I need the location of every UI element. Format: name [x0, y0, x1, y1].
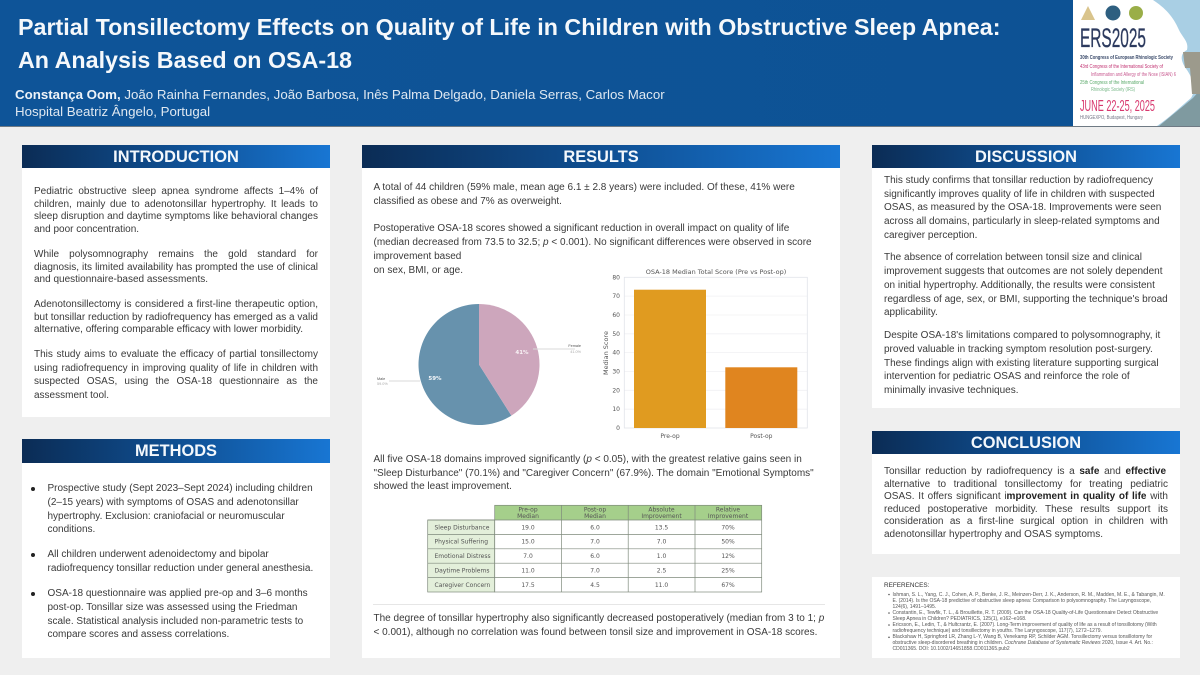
table header — [495, 505, 762, 520]
table values: 19.0 — [521, 524, 535, 532]
methods bullet 2: All children underwent adenoidectomy and bipolar — [48, 549, 269, 560]
references list: obstructive sleep-disordered breathing in children. Cochrane Database of Systematic Reviews 2020, Issue 4. Art. No.: — [892, 640, 1153, 646]
discussion paragraph 2: on initial hypertrophy. Additionally, the results were consistent — [884, 280, 1155, 291]
results paragraph 3 — [374, 454, 814, 492]
methods heading: METHODS — [135, 442, 217, 460]
pie slice: male 59% — [419, 304, 511, 425]
conclusion text: Tonsillar reduction by radiofrequency is a safe and effective — [884, 466, 1166, 477]
table values: 12% — [721, 553, 735, 560]
table values: 67% — [721, 582, 735, 589]
congress logo: ERS2025: 30th Congress of European Rhinologic Society — [1080, 55, 1173, 61]
introduction paragraph 3: alternative, offering comparable efficacy with lower morbidity. — [34, 324, 303, 335]
header banner — [0, 0, 1200, 127]
title — [18, 14, 1000, 73]
introduction paragraph 4: This study aims to evaluate the efficacy of partial tonsillectomy — [34, 349, 318, 360]
bar: post-op 32.5 — [725, 367, 797, 428]
conclusion text: consideration as a first-line surgical option in children with — [884, 516, 1168, 527]
references list: Ericsson, E., Ledin, T., & Hultcrantz, E. (2007). Long-Term improvement of quality of life as a result of tonsillotomy (With — [892, 622, 1157, 628]
results paragraph 2: Postoperative OSA-18 scores showed a significant reduction in overall impact on quality of life — [374, 223, 789, 234]
introduction paragraph 3 — [34, 299, 318, 335]
references list: 124(6), 1491–1495. — [892, 604, 936, 610]
y axis labels: 60 — [612, 312, 620, 319]
table values: 13.5 — [655, 524, 668, 532]
bar chart: OSA-18 median total score — [602, 268, 808, 440]
references list: E. (2014). Is the OSA-18 predictive of obstructive sleep apnea: Comparison to polysomnography. The Laryngoscope, — [892, 598, 1151, 604]
discussion paragraph 3: These findings align with existing literature supporting surgical — [884, 358, 1159, 369]
results paragraph 1 — [374, 182, 795, 207]
introduction paragraph 1: Pediatric obstructive sleep apnea syndrome affects 1–4% of — [34, 186, 318, 197]
discussion paragraph 1: OSAS, as measured by the OSA-18. Improvements were seen — [884, 202, 1161, 213]
table values: 11.0 — [521, 568, 535, 574]
discussion heading — [872, 145, 1180, 168]
y axis labels: 0 — [616, 425, 620, 432]
table header: Median — [584, 513, 606, 520]
x axis labels: Pre-op — [660, 433, 680, 440]
discussion paragraph 1: across all domains, particularly in sleep-related symptoms and — [884, 216, 1160, 227]
pie slice: female 41%: 41% — [515, 350, 529, 356]
table values — [521, 524, 735, 589]
y axis labels: 40 — [612, 350, 620, 357]
methods bullet 2 — [31, 549, 313, 574]
conclusion text: OSAS. It offers significant improvement in quality of life with — [884, 491, 1168, 502]
discussion paragraph 2: applicability. — [884, 307, 938, 318]
table row labels: Sleep Disturbance — [434, 524, 490, 532]
plot area — [624, 277, 807, 428]
methods bullet 3 — [31, 588, 308, 640]
congress logo: ERS2025: Rhinologic Society (IRS) — [1091, 87, 1135, 93]
introduction paragraph 1: sleep disruption and daytime symptoms like behavioral changes — [34, 211, 318, 222]
table header: Improvement — [708, 513, 749, 520]
label: female: 41.0% — [570, 350, 582, 354]
bar: pre-op 73.5 — [634, 290, 706, 428]
table values: 6.0 — [590, 524, 600, 532]
results paragraph 4: < 0.001), although no correlation was found between tonsil size and improvement in OSA-18 scores. — [374, 627, 817, 638]
introduction paragraph 1: and poor concentration. — [34, 224, 139, 235]
label: male — [377, 377, 420, 386]
discussion paragraph 2 — [884, 252, 1168, 318]
discussion paragraph 3: intervention for pediatric OSAS and reinforce the role of — [884, 371, 1130, 382]
y axis labels — [612, 274, 620, 432]
chart title: OSA-18 Median Total Score (Pre vs Post-op) — [646, 268, 786, 276]
table values: 4.5 — [590, 582, 600, 589]
results heading: RESULTS — [563, 148, 639, 166]
table header: Median — [517, 513, 539, 520]
methods bullet 1: (2–15 years) with symptoms of OSAS and adenotonsillar — [48, 497, 299, 508]
panel: results — [362, 145, 840, 658]
introduction heading: INTRODUCTION — [113, 148, 239, 166]
methods bullet 1: conditions. — [48, 524, 95, 535]
pie chart: sex distribution — [377, 304, 582, 425]
table header: Relative — [716, 506, 740, 514]
table header: Pre-op — [518, 506, 538, 514]
introduction paragraph 2: and questionnaire-based assessments. — [34, 274, 208, 285]
authors and affiliation: Constança Oom, João Rainha Fernandes, João Barbosa, Inês Palma Delgado, Daniela Serras, Carlos Macor — [15, 87, 665, 102]
results paragraph 2: on sex, BMI, or age. — [374, 265, 463, 276]
methods bullet 1 — [31, 483, 313, 535]
panel: introduction — [22, 145, 330, 417]
table values: 15.0 — [521, 539, 535, 546]
introduction paragraph 4: assessment tool. — [34, 390, 109, 401]
table values: 7.0 — [590, 539, 600, 546]
table header: Post-op — [584, 506, 606, 514]
discussion paragraph 1: caregiver perception. — [884, 230, 977, 241]
table row labels: Daytime Problems — [434, 568, 489, 574]
results paragraph 4 — [374, 613, 824, 638]
discussion paragraph 3: minimally invasive techniques. — [884, 385, 1019, 396]
conclusion heading — [872, 431, 1180, 454]
results paragraph 3: "Sleep Disturbance" (70.1%) and "Caregiver Concern" (67.9%). The domain "Emotional Symptoms" — [374, 468, 814, 479]
title: Partial Tonsillectomy Effects on Quality of Life in Children with Obstructive Sleep Apnea: — [18, 14, 1000, 40]
table values: 1.0 — [657, 553, 666, 560]
references heading: REFERENCES: — [884, 582, 929, 588]
panel: discussion — [872, 145, 1180, 408]
table header: Absolute — [648, 506, 675, 514]
table row labels — [428, 520, 495, 592]
y axis labels: 30 — [612, 368, 620, 376]
table values: 7.0 — [523, 553, 533, 560]
congress logo: ERS2025: HUNGEXPO, Budapest, Hungary — [1080, 115, 1143, 121]
table values: 25% — [721, 568, 735, 574]
methods bullet 3: scale. Statistical analysis included non-parametric tests to — [48, 616, 303, 626]
introduction paragraph 2 — [34, 249, 318, 285]
table values: 50% — [721, 539, 735, 546]
results paragraph 2: improvement based — [374, 251, 461, 262]
methods bullet 3: post-op. Tonsillar size was assessed using the Friedman — [48, 602, 297, 613]
results paragraph 1: A total of 44 children (59% male, mean age 6.1 ± 2.8 years) were included. Of these, 41% were — [374, 182, 795, 193]
table row labels: Caregiver Concern — [434, 582, 490, 589]
conclusion text — [884, 466, 1168, 540]
table values: 70% — [721, 524, 735, 532]
results paragraph 1: classified as obese and 7% as overweight. — [374, 196, 562, 207]
table values: 17.5 — [521, 582, 535, 589]
introduction paragraph 1 — [34, 186, 318, 235]
panel: references — [872, 577, 1180, 658]
introduction paragraph 1: children, mainly due to adenotonsillar hypertrophy. It leads to — [34, 199, 318, 210]
y axis labels: 20 — [612, 387, 620, 394]
introduction heading — [22, 145, 330, 168]
pie slice: female 41% — [479, 304, 540, 416]
y axis labels: 70 — [612, 293, 620, 300]
discussion paragraph 2: The absence of correlation between tonsil size and clinical — [884, 252, 1142, 263]
x axis labels: Post-op — [750, 433, 773, 440]
label: male: Male — [377, 377, 385, 381]
table values: 6.0 — [590, 553, 600, 560]
congress logo: ERS2025: 43rd Congress of the International Society of — [1080, 64, 1164, 70]
congress logo: ERS2025: ERS2025 — [1080, 23, 1146, 53]
discussion paragraph 1: significantly improves quality of life in children with suspected — [884, 189, 1155, 200]
discussion paragraph 2: improvement suggests that outcomes are not solely dependent — [884, 266, 1162, 277]
panel: conclusion — [872, 431, 1180, 554]
domain results table — [427, 504, 762, 592]
table values: 7.0 — [590, 568, 600, 574]
results heading — [362, 145, 840, 168]
methods bullet 3: compare scores and assess correlations. — [48, 629, 229, 640]
conclusion text: reduced postoperative morbidity. These results support its — [884, 504, 1168, 515]
references list: Blackshaw H, Springford LR, Zhang L-Y, Wang B, Venekamp RP, Schilder AGM. Tonsillectomy versus tonsillotomy for — [892, 634, 1152, 640]
congress logo: ERS2025: Inflammation and Allergy of the Nose (ISIAN) 6 — [1091, 72, 1176, 78]
conclusion text: adenotonsillar hypertrophy and OSAS symptoms. — [884, 529, 1103, 540]
conclusion text: alternative to traditional tonsillectomy for treating pediatric — [884, 479, 1168, 490]
congress logo: ERS2025: 25th Congress of the International — [1080, 80, 1144, 86]
introduction paragraph 4: using radiofrequency in improving quality of life in children with — [34, 363, 318, 374]
methods bullet 3: OSA-18 questionnaire was applied pre-op and 3–6 months — [48, 588, 308, 599]
introduction paragraph 2: While polysomnography remains the gold standard for — [34, 249, 318, 260]
introduction paragraph 3: but tonsillar reduction by radiofrequency has emerged as a valid — [34, 312, 318, 323]
table values: 7.0 — [657, 539, 666, 546]
discussion paragraph 1: This study confirms that tonsillar reduction by radiofrequency — [884, 175, 1153, 186]
y axis labels: 80 — [612, 274, 620, 281]
references list: Constantin, E., Tewfik, T. L., & Brouillette, R. T. (2009). Can the OSA-18 Quality-of-Life Questionnaire Detect Obstructive — [892, 610, 1158, 616]
discussion paragraph 3 — [884, 330, 1160, 396]
label: female — [533, 344, 582, 354]
references list: Sleep Apnea in Children? PEDIATRICS, 125(1), e162–e168. — [892, 616, 1026, 622]
y axis labels: 10 — [612, 406, 620, 413]
results paragraph 4: The degree of tonsillar hypertrophy also significantly decreased postoperatively (median from 3 to 1; p — [374, 613, 824, 624]
methods bullet 2: radiofrequency tonsillar reduction under general anesthesia. — [48, 563, 313, 574]
title: An Analysis Based on OSA-18 — [18, 47, 352, 73]
results paragraph 2: (median decreased from 73.5 to 32.5; p < 0.001). No significant differences were observed in score — [374, 237, 812, 248]
pie slice: male 59%: 59% — [428, 376, 442, 382]
table header: Improvement — [641, 513, 682, 520]
authors and affiliation: Hospital Beatriz Ângelo, Portugal — [15, 104, 210, 118]
methods heading — [22, 439, 330, 463]
discussion paragraph 2: regardless of age, sex, or BMI, supporting the technique's broad — [884, 294, 1168, 305]
label: female: Female — [568, 344, 581, 348]
table row labels: Physical Suffering — [434, 539, 488, 546]
y axis labels: 50 — [612, 331, 620, 338]
results paragraph 2 — [374, 223, 812, 276]
congress logo: ERS2025 — [1073, 0, 1200, 126]
results paragraph 3: showed the least improvement. — [374, 481, 512, 492]
references list: Ishman, S. L., Yang, C. J., Cohen, A. P., Benke, J. R., Meinzen-Derr, J. K., Anderson, R. M., Madden, M. E., & Tabangin, M. — [892, 592, 1165, 598]
introduction paragraph 4: suspected OSAS, using the OSA-18 questionnaire as the — [34, 376, 318, 387]
discussion paragraph 1 — [884, 175, 1161, 241]
methods bullet 1: Prospective study (Sept 2023–Sept 2024) including children — [48, 483, 313, 494]
table row labels: Emotional Distress — [434, 553, 491, 560]
references bullets — [888, 594, 890, 638]
y axis title: Median Score — [602, 331, 610, 375]
conclusion heading: CONCLUSION — [971, 434, 1081, 452]
results paragraph 3: All five OSA-18 domains improved significantly (p < 0.05), with the greatest relative gains seen in — [374, 454, 802, 465]
authors and affiliation — [15, 87, 665, 118]
introduction paragraph 4 — [34, 349, 318, 401]
table values: 11.0 — [655, 582, 668, 589]
table values: 2.5 — [657, 568, 666, 574]
introduction paragraph 2: diagnosis, its limited availability has prompted the use of clinical — [34, 262, 318, 273]
references list: radiofrequency technique) and tonsillectomy in youths. The Laryngoscope, 117(7), 1272–1279. — [892, 628, 1102, 634]
references list: CD011365. DOI: 10.1002/14651858.CD011365.pub2 — [892, 646, 1010, 652]
discussion paragraph 3: proved valuable in tracking symptom resolution post-surgery. — [884, 344, 1153, 355]
label: male: 59.0% — [377, 382, 388, 386]
methods bullet 1: hypertrophy. Exclusion: craniofacial or neuromuscular — [48, 510, 285, 522]
references list — [892, 592, 1165, 652]
panel: methods — [22, 439, 330, 658]
discussion paragraph 3: Despite OSA-18's limitations compared to polysomnography, it — [884, 330, 1160, 341]
introduction paragraph 3: Adenotonsillectomy is considered a first-line therapeutic option, — [34, 299, 318, 310]
x axis labels — [660, 433, 773, 440]
discussion heading: DISCUSSION — [975, 148, 1077, 166]
